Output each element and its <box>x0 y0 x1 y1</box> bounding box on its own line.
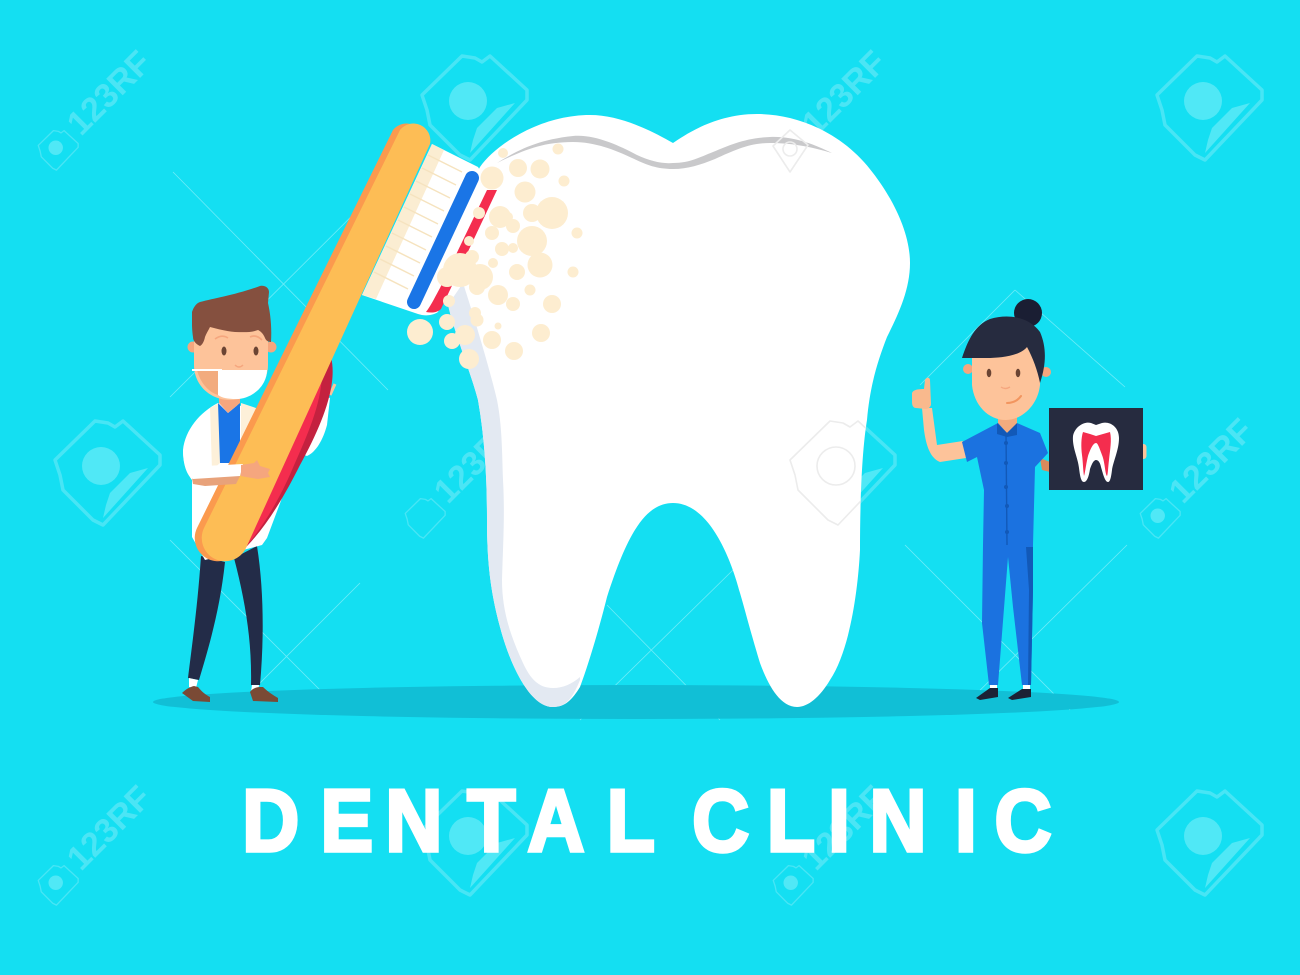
handle <box>202 124 430 561</box>
giant tooth <box>447 114 910 707</box>
nurse shirt <box>962 423 1048 545</box>
watermark: egg far bottom right <box>1157 791 1262 895</box>
dentist left leg <box>188 556 225 680</box>
hair <box>192 286 271 346</box>
sleeve shade <box>192 472 242 486</box>
brush back bright red <box>225 372 322 553</box>
bristles <box>362 144 492 315</box>
dentist right leg <box>234 546 263 685</box>
tooth left edge shading <box>448 283 580 707</box>
watermark: 123RF bottom right: 123RF <box>795 779 894 878</box>
ears <box>963 364 973 374</box>
bristle lines <box>374 155 462 289</box>
faint watermark on tooth <box>772 129 866 526</box>
watermark: 123RF right middle <box>1140 412 1261 538</box>
tooth body <box>447 114 910 707</box>
nurse far arm <box>1040 458 1050 472</box>
nurse left shoe <box>976 688 998 700</box>
bristle base <box>362 144 444 299</box>
watermark: 123RF bottom left <box>38 779 159 905</box>
sleeve <box>183 440 243 479</box>
mask shade <box>197 370 218 395</box>
watermark: 123RF right middle: 123RF <box>1162 412 1261 511</box>
hair <box>962 317 1045 383</box>
ground shadow <box>153 685 1119 719</box>
watermark: 123RF bottom left: 123RF <box>60 779 159 878</box>
dentist far sleeve <box>296 395 330 456</box>
toothpaste blue stripe <box>414 178 472 302</box>
nose <box>1001 387 1010 388</box>
card <box>1049 408 1143 490</box>
eyes <box>987 369 991 377</box>
x-ray tooth outline <box>1073 423 1119 482</box>
foam bubbles <box>407 144 582 369</box>
watermark: 123RF top left: 123RF <box>60 44 159 143</box>
face <box>972 345 1040 420</box>
neck <box>998 416 1017 433</box>
watermark: egg left middle <box>55 421 160 525</box>
eyes <box>222 346 226 356</box>
toothbrush <box>195 124 497 561</box>
hand <box>241 460 270 479</box>
dentist near arm <box>183 440 270 486</box>
dentist shirt <box>218 403 240 463</box>
fingers <box>1139 444 1146 459</box>
mask <box>218 370 267 399</box>
mask strap <box>192 369 222 371</box>
shirt placket <box>1006 432 1007 545</box>
watermark: egg top <box>422 56 527 160</box>
coat lapel <box>210 403 256 470</box>
toothpaste red stripe <box>426 190 497 313</box>
nurse pants <box>982 545 1033 685</box>
watermark: 123RF centre: 123RF <box>427 412 526 511</box>
watermark: 123RF bottom right <box>773 779 894 905</box>
nurse raised arm <box>922 408 966 462</box>
eyebrows <box>215 336 262 340</box>
dentist right shoe <box>250 687 278 702</box>
nurse head <box>962 299 1051 420</box>
nurse right shoe <box>1008 689 1031 700</box>
dentist socks <box>189 678 259 692</box>
nose <box>235 365 243 367</box>
shirt buttons <box>1004 441 1009 534</box>
collar <box>997 423 1017 437</box>
dentist fingers behind brush <box>330 384 335 395</box>
x-ray tooth pulp <box>1081 432 1111 476</box>
pants shade <box>1026 547 1033 685</box>
dentist coat <box>183 403 300 560</box>
dentist left shoe <box>182 686 210 702</box>
ears <box>188 342 198 352</box>
watermark: egg far right <box>1157 56 1262 160</box>
watermark: 123RF top right <box>773 44 894 170</box>
dentist head <box>188 286 276 400</box>
watermark: 123RF top right: 123RF <box>795 44 894 143</box>
smile <box>1007 396 1021 403</box>
watermark: 123RF top left <box>38 44 159 170</box>
dentist body behind brush <box>182 384 335 702</box>
watermark: egg bottom <box>422 791 527 895</box>
thumbs up <box>912 378 931 409</box>
dentist neck <box>219 396 240 413</box>
title: DENTAL CLINIC <box>242 771 1052 870</box>
brush back dark red <box>225 357 333 553</box>
handle dark edge <box>195 124 423 561</box>
socks <box>990 685 1030 690</box>
bun <box>1014 299 1042 327</box>
tooth crown crease <box>497 136 832 169</box>
nurse <box>912 378 1050 700</box>
face <box>194 325 268 400</box>
x-ray card <box>1049 408 1146 490</box>
watermark: 123RF centre <box>405 412 526 538</box>
watermark: egg right middle <box>790 421 895 525</box>
